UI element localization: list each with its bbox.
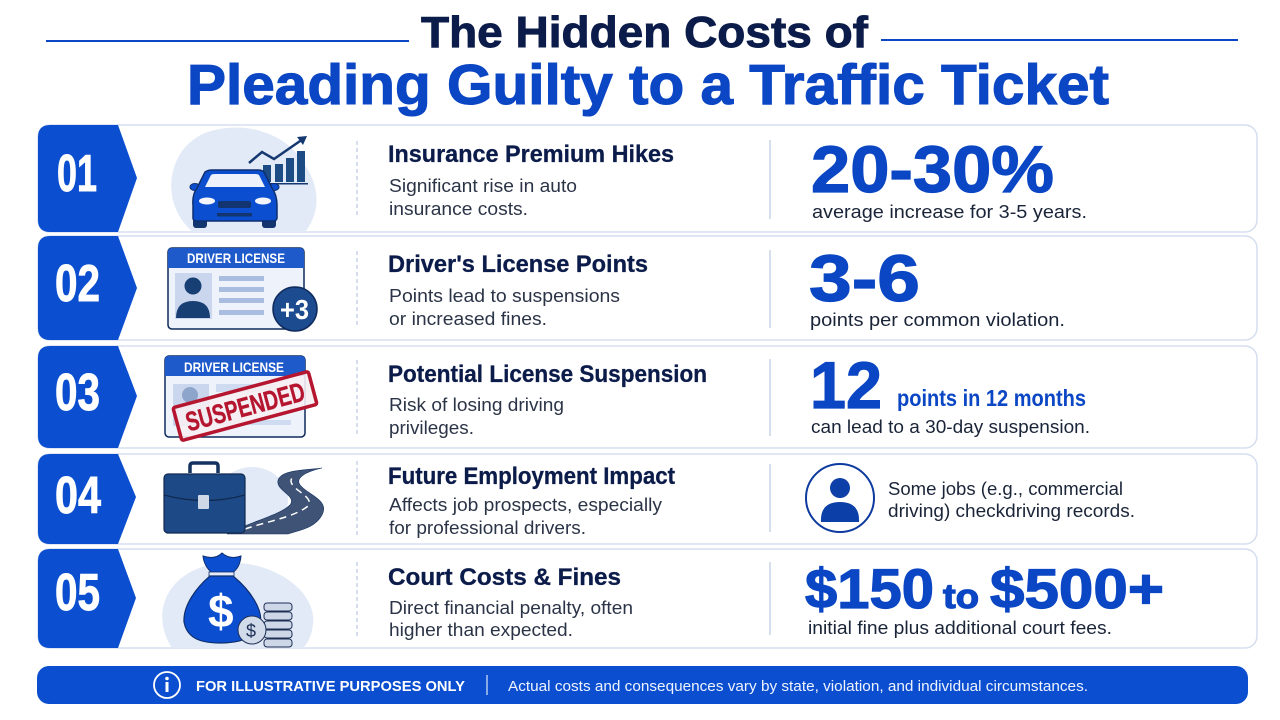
statistic [811, 132, 1087, 222]
heading: Court Costs & Fines [388, 564, 621, 591]
heading: Driver's License Points [388, 251, 648, 278]
description: Significant rise in auto [389, 176, 577, 196]
icon: info [154, 672, 180, 698]
description: Risk of losing driving [389, 395, 564, 415]
description: Points lead to suspensions [389, 286, 620, 306]
description [389, 598, 633, 640]
icon: car with rising chart [171, 128, 317, 232]
number badge 01: 01 [57, 145, 97, 203]
description: insurance costs. [389, 199, 528, 219]
statistic: $150 [805, 557, 934, 620]
panel: future employment impact [38, 454, 1257, 544]
description: higher than expected. [389, 620, 573, 640]
number badge 03 [38, 346, 137, 448]
footer note: Actual costs and consequences vary by state, violation, and individual circumstances. [508, 679, 1088, 695]
title: The Hidden Costs of [421, 8, 868, 57]
description: Direct financial penalty, often [389, 598, 633, 618]
statistic: can lead to a 30-day suspension. [811, 417, 1090, 437]
panel: insurance premium hikes [38, 125, 1257, 232]
description [389, 176, 577, 219]
description: privileges. [389, 418, 474, 438]
description [389, 495, 662, 538]
icon: money bag and coins: $ [208, 585, 234, 637]
statement: driving) checkdriving records. [888, 501, 1135, 521]
footer label: FOR ILLUSTRATIVE PURPOSES ONLY [196, 679, 465, 695]
heading: Potential License Suspension [388, 361, 707, 388]
statistic [805, 557, 1164, 638]
heading: Insurance Premium Hikes [388, 141, 674, 168]
statistic: $500+ [990, 557, 1164, 620]
statistic [810, 348, 1090, 437]
title [46, 8, 1238, 117]
statistic [809, 241, 1065, 330]
icon: suspended license: DRIVER LICENSE [184, 359, 284, 375]
statistic: 20-30% [811, 132, 1054, 206]
icon: money bag and coins: $ [246, 621, 256, 641]
statistic: to [943, 578, 979, 616]
statistic: initial fine plus additional court fees. [808, 618, 1112, 638]
icon: suspended license: SUSPENDED [182, 377, 308, 437]
number badge 02: 02 [55, 255, 100, 313]
number badge 04: 04 [55, 467, 101, 525]
panel: court costs and fines [38, 549, 1257, 648]
statistic: 3-6 [809, 241, 920, 315]
title: Pleading Guilty to a Traffic Ticket [187, 53, 1109, 117]
description: Affects job prospects, especially [389, 495, 662, 515]
icon: money bag and coins [162, 553, 313, 648]
statistic: 12 [810, 348, 882, 422]
number badge 01 [38, 125, 137, 232]
footer banner [37, 666, 1248, 704]
number badge 05: 05 [55, 564, 100, 622]
description [389, 395, 564, 438]
number badge 05 [38, 549, 136, 648]
icon: license with +3 badge: +3 [280, 294, 309, 325]
icon: person in circle [806, 464, 874, 532]
statistic: points in 12 months [897, 385, 1086, 411]
number badge 02 [38, 236, 137, 340]
icon: license with +3 badge [168, 248, 317, 331]
description [389, 286, 620, 329]
icon: license with +3 badge: DRIVER LICENSE [187, 250, 285, 266]
icon: suspended license [165, 356, 317, 441]
panel: potential license suspension [38, 346, 1257, 448]
panel: driver's license points [38, 236, 1257, 340]
heading: Future Employment Impact [388, 463, 675, 490]
icon: briefcase and road [164, 463, 324, 534]
description: for professional drivers. [389, 518, 586, 538]
number badge 04 [38, 454, 136, 544]
statement: Some jobs (e.g., commercial [888, 479, 1123, 499]
number badge 03: 03 [55, 364, 100, 422]
statement [888, 479, 1135, 521]
description: or increased fines. [389, 309, 547, 329]
statistic: points per common violation. [810, 310, 1065, 330]
statistic: average increase for 3-5 years. [812, 202, 1087, 222]
